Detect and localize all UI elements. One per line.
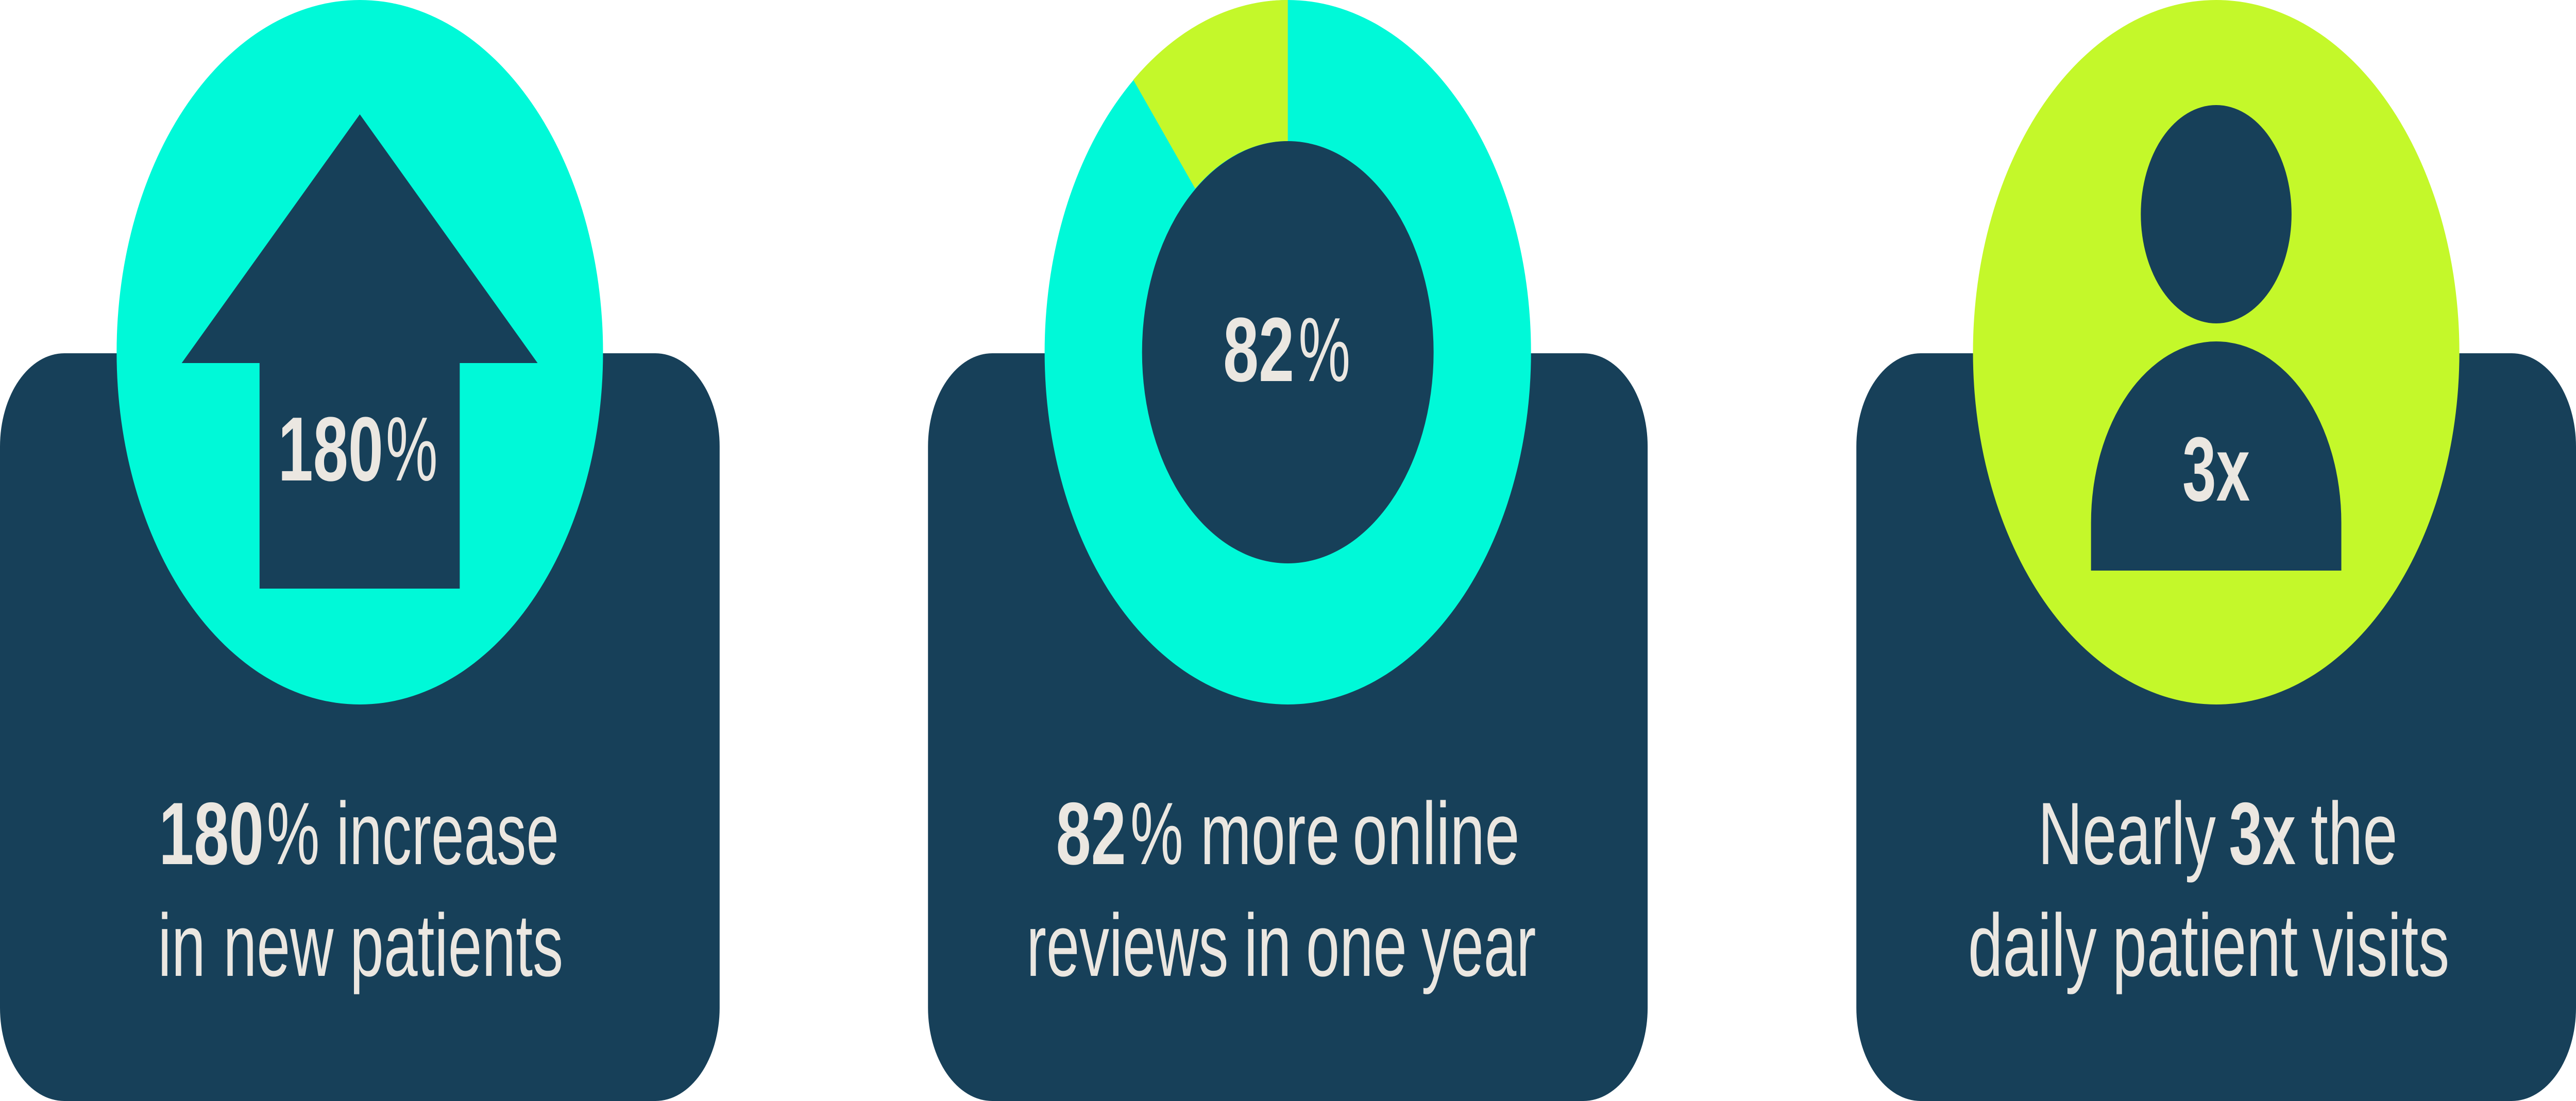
icon: person [2091,105,2342,571]
panel background card [1856,353,2576,1101]
caption line 2: in [158,896,206,995]
caption line 2: one [1306,896,1407,995]
donut chart: 82 percent [1045,0,1531,704]
panel: daily patient visits [1856,0,2576,1101]
caption line 2: year [1421,896,1536,995]
caption line 2: visits [2312,896,2449,995]
caption line 1: increase [336,784,559,883]
caption line 1: more [1200,784,1340,883]
arrow stat: 180%: 180 [278,399,383,500]
caption line 2: new [223,896,334,995]
caption line 1: 180 [159,784,264,883]
icon: up arrow [182,114,537,589]
caption line 2: reviews [1026,896,1228,995]
panel: new patients [0,0,720,1101]
donut stat: 82%: 82 [1223,299,1294,401]
caption line 1: Nearly [2038,784,2216,883]
caption line 2: patients [350,896,563,995]
caption line 2: in [1244,896,1292,995]
caption line 1: % [1130,784,1183,883]
caption line 1: 3x [2229,784,2296,883]
caption line 1: online [1352,784,1520,883]
panel background card [0,353,720,1101]
icon: teal circle [116,0,603,704]
caption line 1: the [2311,784,2398,883]
caption line 1: 82 [1056,784,1126,883]
donut stat: 82%: % [1298,299,1350,401]
caption line 2: patient [2112,896,2298,995]
arrow stat: 180%: % [386,399,438,500]
panel: online reviews [928,0,1648,1101]
person stat: 3x: 3x [2182,419,2250,520]
panel background card [928,353,1648,1101]
icon: lime circle [1973,0,2460,704]
caption line 1: % [267,784,319,883]
caption line 2: daily [1968,896,2097,995]
